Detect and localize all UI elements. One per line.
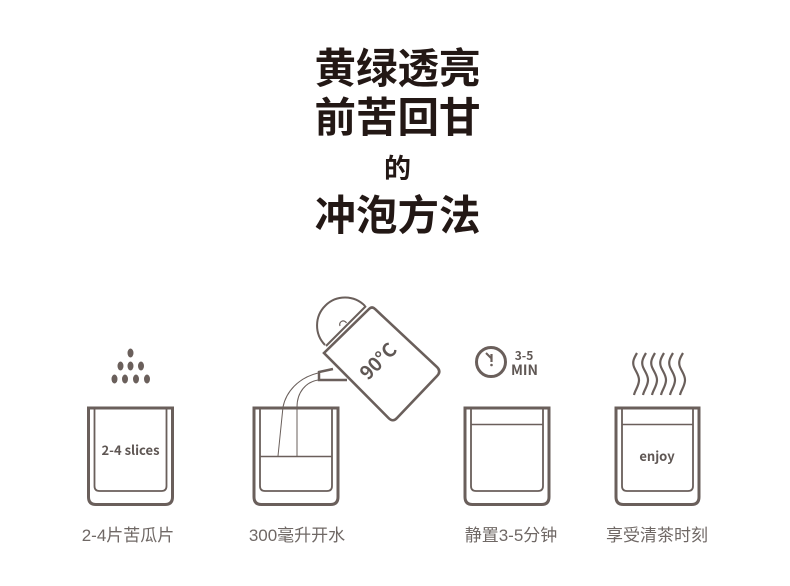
caption: step 3: 静置3-5分钟 — [465, 526, 557, 545]
title line 1: 黄绿透亮 — [314, 35, 480, 95]
icon: steam — [633, 353, 685, 395]
caption: step 4: 享受清茶时刻 — [606, 526, 708, 545]
water level — [260, 456, 332, 458]
title line 3: 冲泡方法 — [314, 182, 480, 242]
glass 4 — [616, 408, 699, 504]
kettle lid dome — [317, 298, 365, 345]
glass 3 — [465, 408, 549, 504]
caption: step 1: 2-4片苦瓜片 — [82, 526, 174, 545]
kettle pouring — [317, 298, 439, 420]
icon: timer — [476, 347, 538, 380]
kettle spout — [319, 369, 347, 380]
kettle temperature: 90°C — [353, 336, 402, 385]
label: 2-4 slices: 2-4 slices — [101, 440, 160, 459]
title line 2: 前苦回甘 — [314, 84, 480, 144]
icon: tea slices dots — [112, 348, 150, 384]
kettle body — [324, 308, 439, 420]
timer label: 3-5 — [515, 347, 533, 364]
kettle lid line — [326, 306, 366, 346]
icon: timer: MIN — [511, 360, 538, 380]
title — [314, 35, 480, 242]
title connector: 的 — [384, 147, 411, 186]
water stream — [278, 373, 318, 456]
label: enjoy: enjoy — [639, 446, 675, 465]
glass 1 — [88, 408, 172, 504]
caption: step 2: 300毫升开水 — [249, 526, 345, 545]
kettle lid knob — [340, 321, 346, 326]
glass 2 with water — [254, 373, 338, 504]
